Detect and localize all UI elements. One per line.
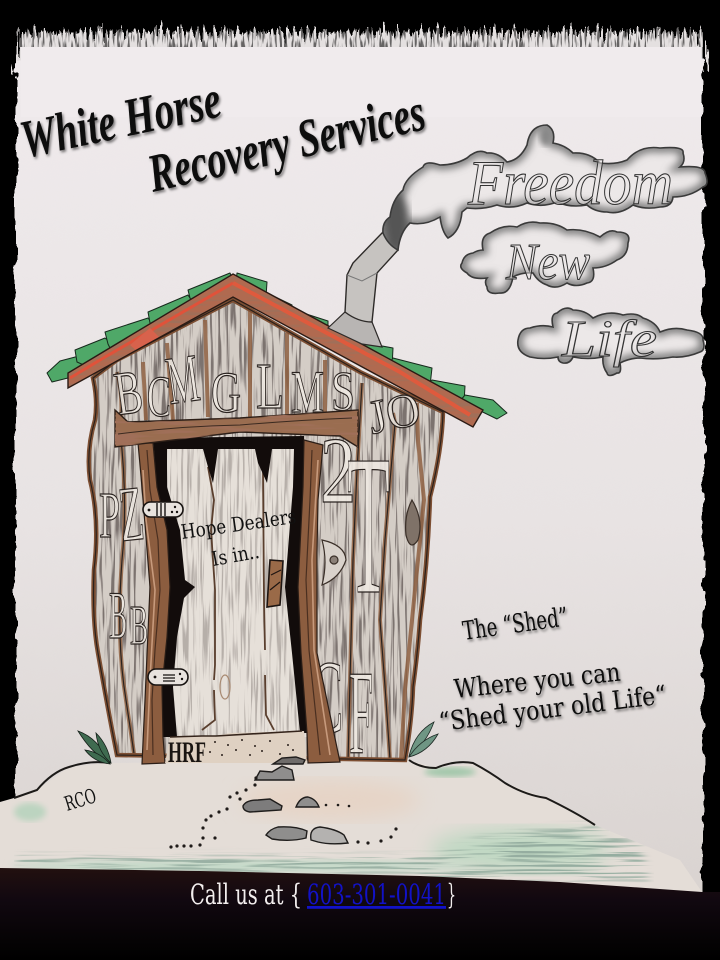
stepping stones (243, 757, 348, 844)
grass tuft left (78, 731, 111, 764)
door handle (267, 560, 283, 607)
chimney (328, 232, 398, 347)
door jamb posts (138, 440, 340, 764)
artist initials: RCO (61, 783, 99, 816)
door sign text (179, 504, 298, 571)
carved initials on the walls: G (211, 360, 241, 425)
smoke cloud: Life (518, 308, 704, 376)
red roof (60, 270, 490, 435)
carved initials on the walls: B (130, 595, 148, 657)
smoke cloud: New (461, 222, 629, 293)
door (157, 443, 307, 738)
caption: Where you can (437, 658, 668, 738)
smoke cloud: Freedom (383, 125, 707, 252)
call to action phone line (190, 878, 456, 911)
dark door gap (153, 436, 307, 737)
carved initials on the walls: JO (363, 382, 425, 445)
hinge bottom (148, 669, 188, 685)
door step with dots (165, 731, 307, 769)
shed wall planks (85, 295, 450, 765)
grass tuft right (409, 722, 438, 757)
green shingles (47, 273, 507, 419)
carved initials on the walls: P (99, 479, 120, 552)
carved initials on the walls: Z (115, 469, 148, 558)
carved initials on the walls: B (110, 358, 147, 429)
caption: Where you can: Where you can (453, 658, 622, 705)
carved initials on the walls: L (256, 350, 284, 423)
wood knots (322, 500, 420, 585)
door sign text: Hope Dealers (179, 504, 298, 544)
smoke cloud: Life: Life (561, 311, 657, 368)
caption: The Shed: The “Shed” (461, 602, 570, 647)
smoke cloud: Freedom: Freedom (467, 147, 673, 218)
carved initials on the walls: 2 (320, 419, 356, 523)
title: Recovery Services: Recovery Services (142, 82, 430, 204)
chimney flashing (328, 312, 382, 347)
carved initials on the walls: M (162, 339, 204, 419)
ground hill (0, 760, 702, 892)
carved initials on the walls (99, 339, 425, 779)
dark strip below the paper (0, 868, 720, 960)
carved initials on the walls: C (311, 640, 343, 755)
carved initials on the walls: C (147, 364, 171, 429)
door sign text: Is in.. (210, 539, 261, 571)
carved initials on the walls: T (347, 415, 390, 636)
chimney pipe (345, 232, 398, 322)
dotted trail (169, 776, 398, 849)
title: White Horse: White Horse (15, 69, 226, 170)
call to action phone line: } (447, 878, 456, 911)
call to action phone line: 603-301-0041 (307, 878, 446, 911)
caption: Where you can: “Shed your old Life“ (437, 680, 668, 738)
door step with dots: HRF (168, 736, 206, 769)
carved initials on the walls: F (349, 646, 373, 779)
lintel log (112, 408, 362, 448)
hinge top (143, 502, 183, 517)
carved initials on the walls: S (331, 361, 355, 423)
smoke cloud: New: New (505, 234, 590, 291)
shed (85, 295, 450, 779)
carved initials on the walls: M (291, 359, 324, 425)
carved initials on the walls: B (109, 577, 127, 653)
call to action phone line: Call us at { (190, 878, 302, 911)
